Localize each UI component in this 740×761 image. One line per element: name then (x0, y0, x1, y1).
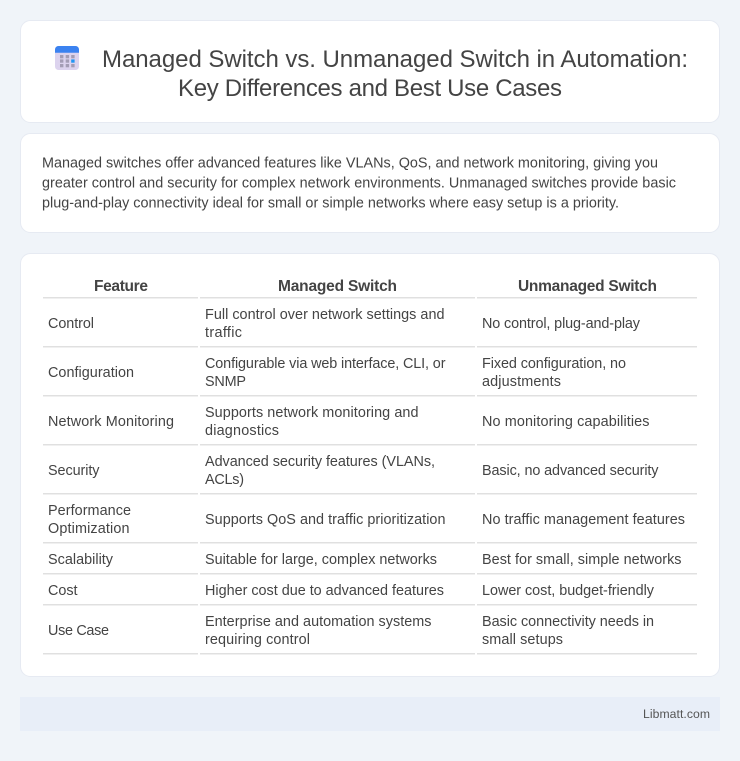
row: Network Monitoring: Network Monitoring (48, 414, 174, 430)
row: Control: No control, plug-and-play (482, 316, 641, 332)
table header: Managed Switch (278, 278, 397, 295)
row: Security: ACLs) (205, 472, 244, 488)
row: Configuration: SNMP (205, 374, 246, 390)
row: Security: Advanced security features (VLANs, (205, 454, 435, 470)
footer credit: Libmatt.com (643, 707, 710, 721)
icon: calendar (55, 46, 79, 70)
row: Security (48, 454, 659, 488)
table header: Feature (94, 278, 148, 295)
row: Performance Optimization: No traffic management features (482, 512, 685, 528)
table header (94, 278, 657, 295)
row: Network Monitoring: No monitoring capabilities (482, 414, 650, 430)
row: Control: traffic (205, 325, 242, 341)
row: Security: Security (48, 463, 100, 479)
row: Control: Control (48, 316, 94, 332)
table header: Unmanaged Switch (518, 278, 657, 295)
row: Use Case: small setups (482, 632, 563, 648)
title (102, 46, 688, 102)
row: Scalability: Best for small, simple networks (482, 552, 682, 568)
panel: summary text (20, 134, 720, 232)
row: Security: Basic, no advanced security (482, 463, 659, 479)
row: Scalability (48, 552, 682, 568)
row: Use Case: requiring control (205, 632, 310, 648)
footer bar (20, 697, 720, 731)
summary paragraph: Managed switches offer advanced features like VLANs, QoS, and network monitoring, giving you (42, 156, 658, 172)
row: Cost (48, 583, 655, 599)
summary paragraph (42, 156, 676, 212)
row: Performance Optimization: Optimization (48, 521, 130, 537)
row: Scalability: Scalability (48, 552, 114, 568)
panel: title card (20, 20, 720, 122)
row: Control (48, 307, 641, 341)
summary paragraph: plug-and-play connectivity ideal for small or simple networks where easy setup is a priority. (42, 196, 619, 212)
row: Network Monitoring: diagnostics (205, 423, 279, 439)
row: Performance Optimization (48, 503, 685, 537)
title: Managed Switch vs. Unmanaged Switch in Automation: (102, 46, 688, 73)
row: Performance Optimization: Supports QoS and traffic prioritization (205, 512, 446, 528)
panel: comparison table (20, 254, 720, 676)
row: Cost: Lower cost, budget-friendly (482, 583, 655, 599)
row: Configuration (48, 356, 626, 390)
row: Cost: Cost (48, 583, 78, 599)
row: Use Case: Basic connectivity needs in (482, 614, 654, 630)
row: Use Case: Enterprise and automation systems (205, 614, 432, 630)
row: Control: Full control over network settings and (205, 307, 444, 323)
row: Performance Optimization: Performance (48, 503, 131, 519)
row: Configuration: adjustments (482, 374, 561, 390)
summary paragraph: greater control and security for complex network environments. Unmanaged switches provide basic (42, 176, 676, 192)
row: Scalability: Suitable for large, complex networks (205, 552, 437, 568)
row: Configuration: Configuration (48, 365, 134, 381)
title: Key Differences and Best Use Cases (178, 75, 562, 102)
row: Use Case: Use Case (48, 623, 109, 639)
row: Use Case (48, 614, 654, 648)
row: Network Monitoring (48, 405, 650, 439)
row: Configuration: Configurable via web interface, CLI, or (205, 356, 446, 372)
row: Configuration: Fixed configuration, no (482, 356, 626, 372)
row: Network Monitoring: Supports network monitoring and (205, 405, 418, 421)
row: Cost: Higher cost due to advanced features (205, 583, 444, 599)
